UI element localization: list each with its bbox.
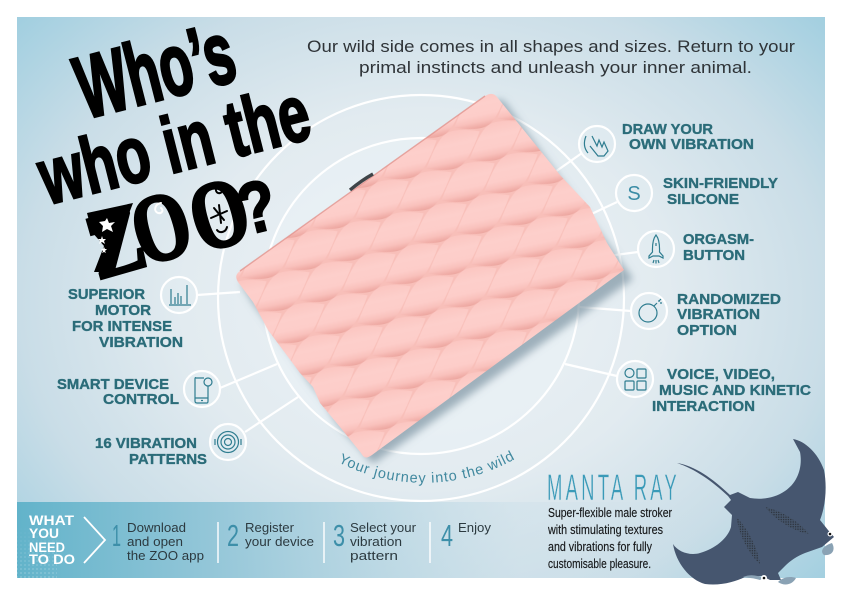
feature: smart device control: SMART DEVICE — [57, 376, 169, 393]
curved caption: Your journey into the wild — [342, 450, 514, 486]
product: pink device — [236, 94, 633, 462]
feature: skin-friendly silicone: SKIN-FRIENDLY — [663, 175, 778, 192]
product description: and vibrations for fully — [548, 539, 652, 554]
product description: customisable pleasure. — [548, 556, 651, 571]
title: who in the — [29, 67, 319, 222]
step 1: 1 — [112, 518, 121, 553]
ZOO lettering: Z — [75, 186, 156, 299]
feature: orgasm button: BUTTON — [683, 247, 745, 264]
product name: MANTA RAY — [547, 468, 680, 509]
feature: skin-friendly silicone — [616, 175, 778, 211]
concentric journey rings — [218, 95, 624, 501]
icon: bomb — [639, 299, 662, 322]
title — [29, 2, 319, 299]
feature: superior motor — [68, 277, 197, 351]
icon: bars — [169, 285, 191, 305]
step 3: vibration — [350, 534, 402, 549]
feature: superior motor: MOTOR — [95, 302, 151, 319]
step 4: 4 — [441, 518, 453, 553]
feature: draw your own vibration: DRAW YOUR — [622, 121, 713, 138]
icon: vibration rings — [215, 432, 241, 452]
ZOO lettering — [75, 156, 261, 299]
feature: superior motor: FOR INTENSE — [72, 318, 172, 335]
feature: randomized vibration: RANDOMIZED — [677, 291, 781, 308]
feature: randomized vibration: OPTION — [677, 322, 737, 339]
feature: superior motor: SUPERIOR — [68, 286, 145, 303]
feature: randomized vibration: VIBRATION — [677, 306, 760, 323]
ray mouth lobes — [743, 543, 834, 585]
arrow chevron — [84, 517, 105, 563]
feature: orgasm button: ORGASM- — [683, 231, 754, 248]
ray eyes — [761, 532, 832, 581]
product description: with stimulating textures — [547, 522, 663, 537]
product description: Super-flexible male stroker — [548, 505, 673, 520]
icon: four squares — [625, 368, 646, 390]
step 3: pattern — [350, 548, 398, 563]
step 1 — [112, 518, 204, 563]
ray body — [673, 439, 834, 585]
ZOO lettering: O — [119, 169, 203, 286]
icon: letter S: S — [627, 183, 641, 205]
intro text — [307, 37, 795, 77]
illustration: manta ray — [673, 439, 834, 585]
device body — [236, 94, 624, 457]
step 1: and open — [127, 534, 183, 549]
step 1: the ZOO app — [127, 548, 204, 563]
ZOO ornament backing — [87, 203, 133, 272]
feature: 16 vibration patterns: 16 VIBRATION — [95, 435, 197, 452]
feature: voice, video, music: INTERACTION — [652, 398, 755, 415]
step 3: 3 — [333, 518, 345, 553]
feature: draw your own vibration — [579, 121, 754, 162]
step 2: 2 — [227, 518, 239, 553]
feature: voice, video, music — [617, 361, 811, 415]
feature: randomized vibration — [631, 291, 781, 339]
ZOO lettering: O — [177, 156, 261, 273]
feature: orgasm button — [638, 231, 754, 267]
icon: smartphone — [195, 378, 208, 403]
ZOO ornaments — [98, 184, 227, 253]
step 4 — [441, 518, 491, 553]
step 4: Enjoy — [458, 520, 491, 535]
icon: rocket — [649, 235, 663, 264]
step 3: Select your — [350, 520, 417, 535]
device button — [350, 174, 373, 190]
icon: hand gesture — [584, 136, 608, 156]
gill left — [737, 518, 760, 564]
bottom band: what you need to do — [17, 502, 514, 578]
feature: draw your own vibration: OWN VIBRATION — [629, 136, 754, 153]
band heading: YOU — [29, 525, 59, 541]
intro text: primal instincts and unleash your inner animal. — [359, 58, 752, 77]
feature: voice, video, music: MUSIC AND KINETIC — [659, 382, 811, 399]
feature: smart device control: CONTROL — [103, 391, 179, 408]
band heading: TO DO — [29, 551, 75, 567]
band heading: NEED — [29, 539, 65, 555]
step 1: Download — [127, 520, 186, 535]
product description — [547, 505, 673, 571]
gill right — [765, 507, 809, 534]
feature: 16 vibration patterns — [95, 424, 246, 468]
step 3 — [333, 518, 417, 563]
step 2 — [227, 518, 314, 553]
connector spokes — [197, 153, 638, 432]
feature: smart device control — [57, 371, 220, 408]
feature: voice, video, music: VOICE, VIDEO, — [667, 366, 775, 383]
feature: superior motor: VIBRATION — [99, 334, 183, 351]
band heading — [29, 512, 75, 567]
intro text: Our wild side comes in all shapes and sizes. Return to your — [307, 37, 795, 56]
band heading: WHAT — [29, 512, 74, 528]
feature: 16 vibration patterns: PATTERNS — [129, 451, 207, 468]
step 2: your device — [245, 534, 314, 549]
feature: skin-friendly silicone: SILICONE — [667, 191, 739, 208]
title: ? — [229, 165, 285, 251]
step 2: Register — [245, 520, 295, 535]
